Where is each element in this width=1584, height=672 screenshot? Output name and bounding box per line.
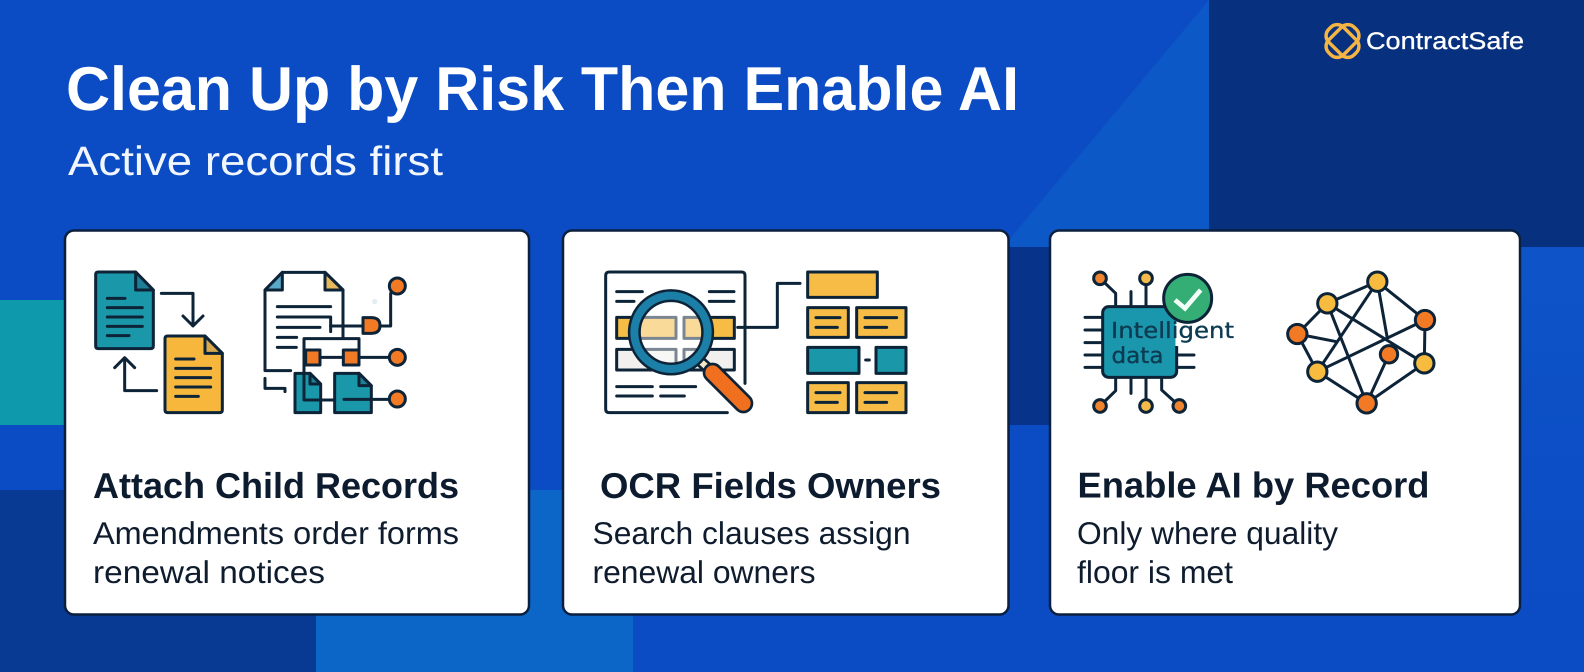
panel: attach child records <box>65 230 529 614</box>
body text: Search clauses assign <box>592 515 910 551</box>
heading: Enable AI by Record <box>1078 464 1430 506</box>
arrow: up <box>115 358 157 391</box>
icon: document linked to child records <box>265 272 405 413</box>
body text: Only where quality <box>1077 515 1338 551</box>
field blocks <box>808 272 906 413</box>
chip label: Intelligent <box>1111 319 1234 344</box>
body text <box>93 515 459 590</box>
connector <box>738 283 800 327</box>
subtitle: Active records first <box>68 138 444 184</box>
chip label: data <box>1112 344 1164 369</box>
icon: neural network <box>1288 272 1435 413</box>
arrow: down <box>161 293 203 326</box>
panel: OCR fields owners <box>563 230 1008 614</box>
body text <box>592 515 910 590</box>
panel: enable AI by record <box>1050 230 1520 614</box>
icon: swapping documents <box>96 272 222 413</box>
heading: Attach Child Records <box>93 465 459 506</box>
icon: intelligent data chip <box>1085 272 1238 412</box>
magnifier <box>634 296 743 403</box>
logo: ContractSafe <box>1322 21 1524 61</box>
body text <box>1077 515 1338 590</box>
body text: renewal notices <box>93 554 325 590</box>
body text: Amendments order forms <box>93 515 459 551</box>
title: Clean Up by Risk Then Enable AI <box>66 55 1019 124</box>
icon: document under magnifier <box>606 272 906 413</box>
logo mark <box>1322 21 1363 61</box>
heading: OCR Fields Owners <box>600 465 941 506</box>
chip label <box>1111 319 1234 369</box>
check badge <box>1164 274 1212 322</box>
logo wordmark: ContractSafe <box>1366 28 1524 55</box>
body text: renewal owners <box>592 554 816 590</box>
body text: floor is met <box>1077 554 1233 590</box>
